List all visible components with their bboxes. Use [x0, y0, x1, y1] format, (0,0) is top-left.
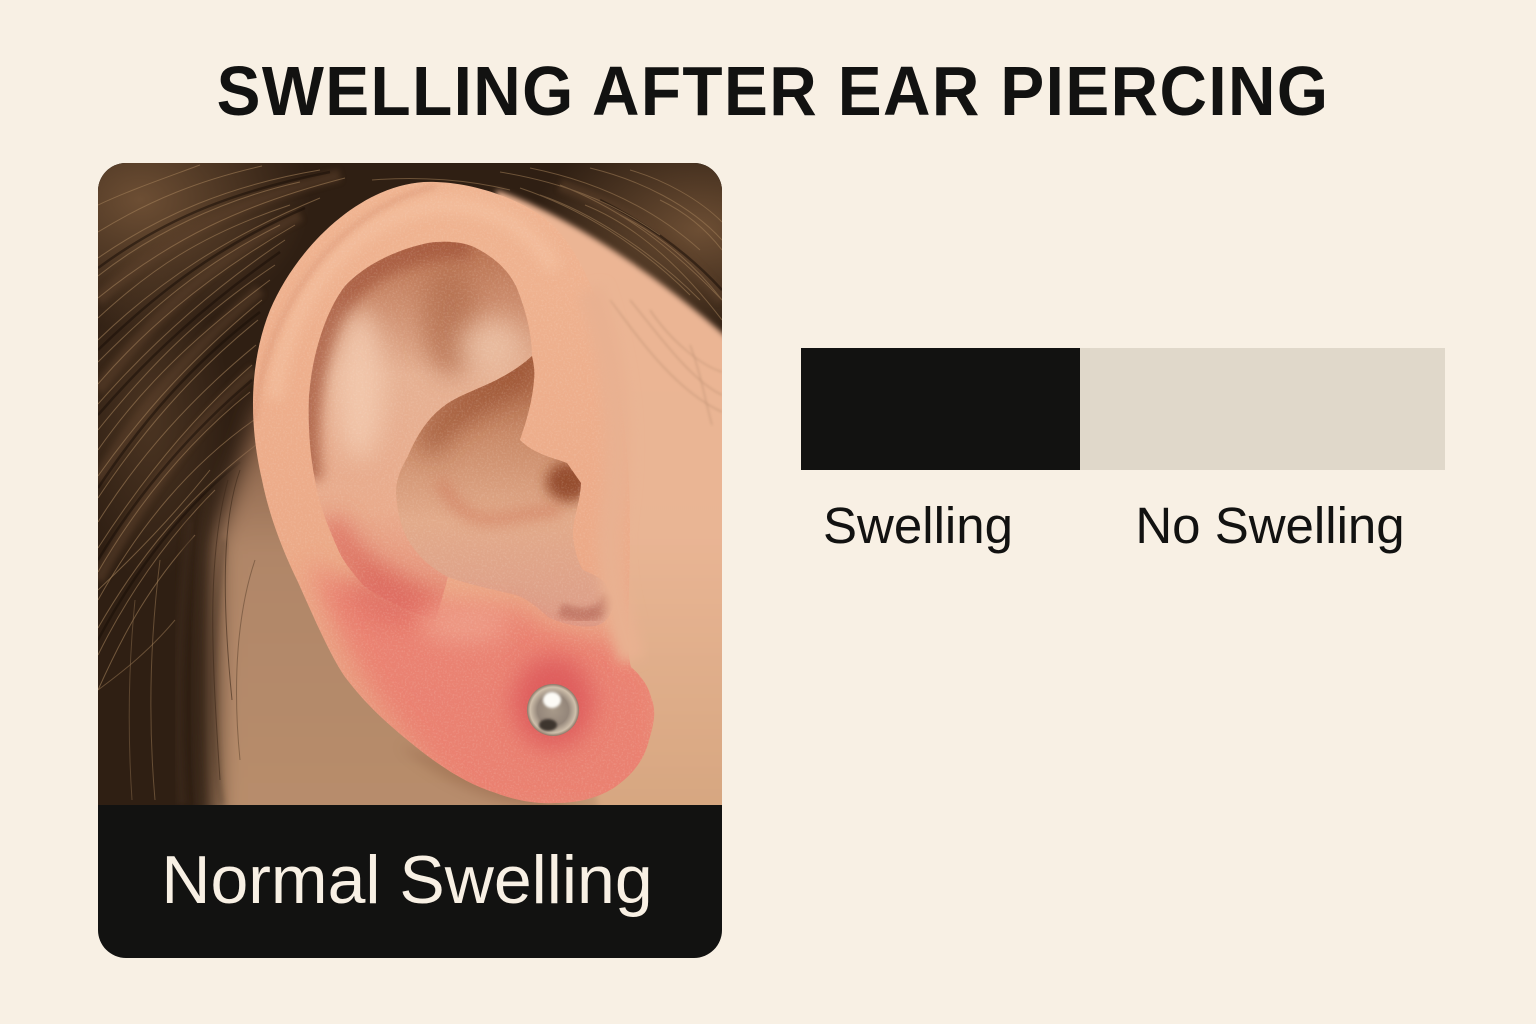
neck skin base — [400, 700, 722, 805]
scapha left dark edge — [307, 246, 470, 480]
lower red crease — [330, 520, 440, 610]
skin grain — [240, 170, 670, 805]
scapha shine — [336, 310, 384, 460]
helix edge shade — [254, 186, 436, 420]
concha bowl — [396, 356, 610, 626]
antihelix shine — [458, 319, 522, 371]
title: SWELLING AFTER EAR PIERCING — [217, 52, 1329, 130]
caption: Normal Swelling: Normal Swelling — [161, 842, 653, 918]
chart: swelling proportion bar — [801, 348, 1445, 470]
concha red band — [440, 480, 560, 519]
panel: ear photo card — [98, 163, 722, 958]
neck skin — [215, 400, 600, 830]
shadow cast under lobe — [400, 745, 570, 808]
icon: ball stud earring — [527, 684, 579, 736]
inflamed piercing spot — [513, 656, 593, 748]
broad hair bands — [98, 175, 722, 580]
lobe redness — [310, 560, 660, 810]
helix highlight — [275, 205, 555, 400]
tragus and face blend — [590, 290, 632, 660]
scapha — [308, 242, 532, 612]
lobe highlight — [420, 607, 510, 643]
hair fringe over neck — [98, 470, 255, 805]
fine hair strands left — [98, 165, 345, 690]
ear shape — [240, 170, 670, 810]
wispy hairs at temple — [610, 300, 722, 425]
hair background — [0, 70, 870, 805]
central fold shadow — [422, 265, 478, 375]
label: Swelling: Swelling — [823, 497, 1013, 554]
bar segment: swelling — [801, 348, 1080, 470]
concha top shadow — [425, 370, 530, 450]
ear outer — [252, 182, 630, 804]
fine hair strands right — [372, 168, 722, 320]
bar segment: no swelling — [1080, 348, 1445, 470]
ear canal shadow — [546, 462, 590, 502]
notch shadow — [560, 595, 610, 615]
face skin — [496, 190, 730, 815]
label: No Swelling: No Swelling — [1135, 497, 1405, 554]
illustration: swollen pierced ear — [98, 163, 722, 805]
red crease below concha — [344, 571, 420, 626]
